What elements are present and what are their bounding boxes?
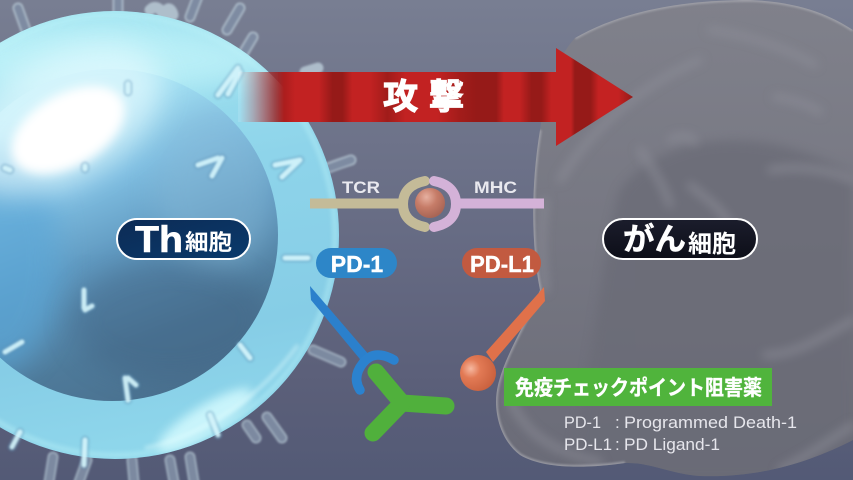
attack label: 攻撃 <box>383 78 475 117</box>
attack arrow <box>230 48 633 146</box>
TCR receptor <box>310 179 425 227</box>
PD-L1 definition: PD-L1 <box>564 435 612 454</box>
cancer cell label <box>603 219 757 259</box>
Th cell label <box>117 219 250 260</box>
immune checkpoint inhibitor banner <box>504 368 772 406</box>
PD-1 definition: : <box>615 413 620 432</box>
cancer cell <box>496 0 853 480</box>
antigen ball <box>415 188 445 218</box>
PD-L1 definition <box>564 435 720 454</box>
Th cell <box>0 0 351 480</box>
cancer cell label: 細胞 <box>688 231 736 258</box>
PD-1 receptor <box>310 286 394 390</box>
PD-L1 definition: : <box>615 435 620 454</box>
immune checkpoint inhibitor banner: 免疫チェックポイント阻害薬 <box>515 377 762 400</box>
cancer cell label: がん <box>623 222 686 257</box>
PD-1 definition: PD-1 <box>564 413 601 432</box>
Th cell label: Th <box>135 219 183 260</box>
MHC receptor <box>434 179 544 227</box>
cell membrane <box>0 11 339 459</box>
PD-L1 definition: PD Ligand-1 <box>624 435 720 454</box>
checkpoint inhibitor antibody <box>373 372 446 433</box>
MHC label: MHC <box>474 179 517 197</box>
TCR label: TCR <box>342 179 380 197</box>
surface bumps <box>5 68 308 465</box>
PD-L1 receptor <box>460 287 545 391</box>
nucleus <box>0 69 278 401</box>
PD-L1 pill label: PD-L1 <box>470 251 534 277</box>
outer spikes <box>18 0 351 480</box>
PD-1 definition: Programmed Death-1 <box>624 413 797 432</box>
Th cell label: 細胞 <box>185 230 232 255</box>
PD-1 pill label: PD-1 <box>331 251 383 277</box>
PD-1 pill label <box>316 248 397 278</box>
highlight <box>0 14 186 226</box>
